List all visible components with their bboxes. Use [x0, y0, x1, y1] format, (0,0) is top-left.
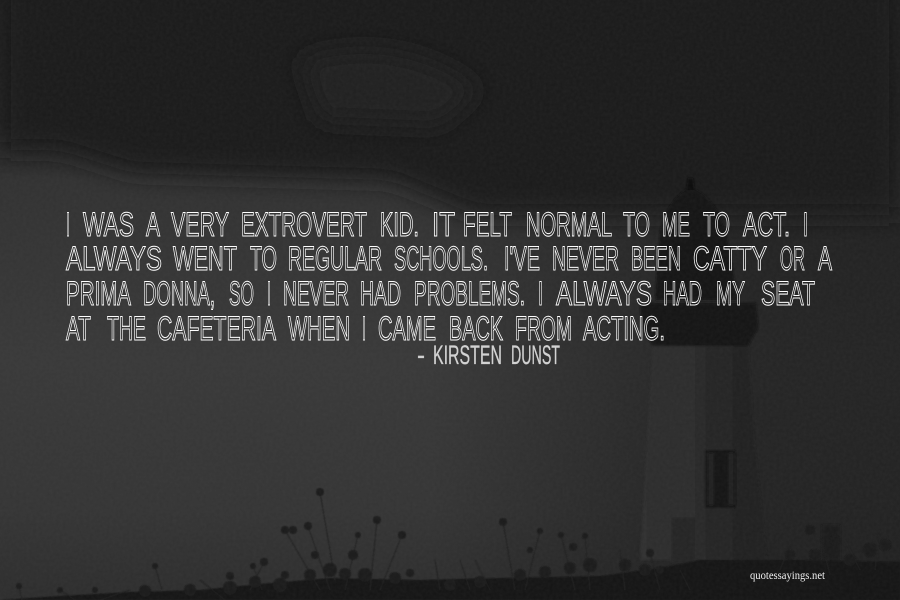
quote line 4: CAME	[378, 310, 436, 348]
quote line 3: SO	[229, 275, 254, 313]
quote line 4: THE	[107, 310, 146, 348]
quote line 1: I	[66, 206, 70, 244]
quote line 1: ME	[662, 206, 690, 244]
attribution: KIRSTEN	[433, 340, 502, 370]
lighthouse	[640, 178, 840, 563]
lighthouse finial	[686, 178, 695, 192]
quote line 1: TO	[623, 206, 650, 244]
quote line 4: ACTING.	[583, 310, 665, 348]
lighthouse gallery	[640, 303, 758, 346]
quote line 2: NEVER	[552, 240, 619, 278]
quote line 1: IT	[432, 206, 455, 244]
quote line 3: PRIMA	[66, 275, 131, 313]
quote line 4: I	[362, 310, 366, 348]
quote line 2: I'VE	[504, 240, 540, 278]
quote line 3: MY	[716, 275, 745, 313]
quote line 3: HAD	[663, 275, 702, 313]
attribution: DUNST	[511, 340, 560, 370]
plant flower heads	[16, 488, 891, 597]
quote line 3: HAD	[360, 275, 401, 313]
lighthouse window	[705, 450, 736, 508]
ground silhouette	[0, 560, 900, 600]
quote line 4: BACK	[449, 310, 503, 348]
attribution: -	[417, 340, 425, 370]
quote text	[66, 206, 832, 348]
quote line 1	[66, 206, 808, 244]
right chimney	[822, 525, 840, 560]
quote line 4: FROM	[515, 310, 572, 348]
quote line 3: I	[267, 275, 271, 313]
quote line 3: I	[538, 275, 543, 313]
quote line 4: CAFETERIA	[157, 310, 276, 348]
quote line 2: SCHOOLS.	[394, 240, 488, 278]
quote line 4: AT	[66, 310, 91, 348]
quote line 1: I	[803, 206, 808, 244]
quote line 1: EXTROVERT	[241, 206, 367, 244]
quote line 2: OR	[780, 240, 805, 278]
quote line 1: WAS	[83, 206, 134, 244]
quote line 2: A	[818, 240, 832, 278]
lighthouse tower	[640, 346, 767, 560]
quote line 2	[66, 240, 832, 278]
quote line 1: FELT	[463, 206, 512, 244]
quote line 1: VERY	[171, 206, 229, 244]
quote line 4: WHEN	[288, 310, 350, 348]
quote line 1: KID.	[380, 206, 419, 244]
quote line 2: BEEN	[631, 240, 681, 278]
plant stems	[19, 492, 880, 600]
quote line 2: WENT	[173, 240, 237, 278]
quote line 2: ALWAYS	[66, 240, 162, 278]
quote line 3: SEAT	[761, 275, 815, 313]
quote line 3	[66, 275, 815, 313]
lighthouse dome	[655, 190, 738, 300]
quote line 2: CATTY	[693, 240, 767, 278]
quote line 3: NEVER	[283, 275, 349, 313]
left chimney	[672, 518, 695, 563]
quote line 1: A	[146, 206, 160, 244]
quote line 4	[66, 310, 665, 348]
quote line 3: DONNA,	[143, 275, 215, 313]
quote line 3: PROBLEMS.	[414, 275, 525, 313]
quote line 1: TO	[703, 206, 730, 244]
quote line 1: ACT.	[743, 206, 790, 244]
watermark: quotessayings.net	[750, 568, 826, 582]
quote line 2: REGULAR	[288, 240, 382, 278]
quote line 1: NORMAL	[526, 206, 612, 244]
foreground plants	[0, 488, 900, 600]
quote line 2: TO	[250, 240, 277, 278]
quote line 3: ALWAYS	[556, 275, 652, 313]
